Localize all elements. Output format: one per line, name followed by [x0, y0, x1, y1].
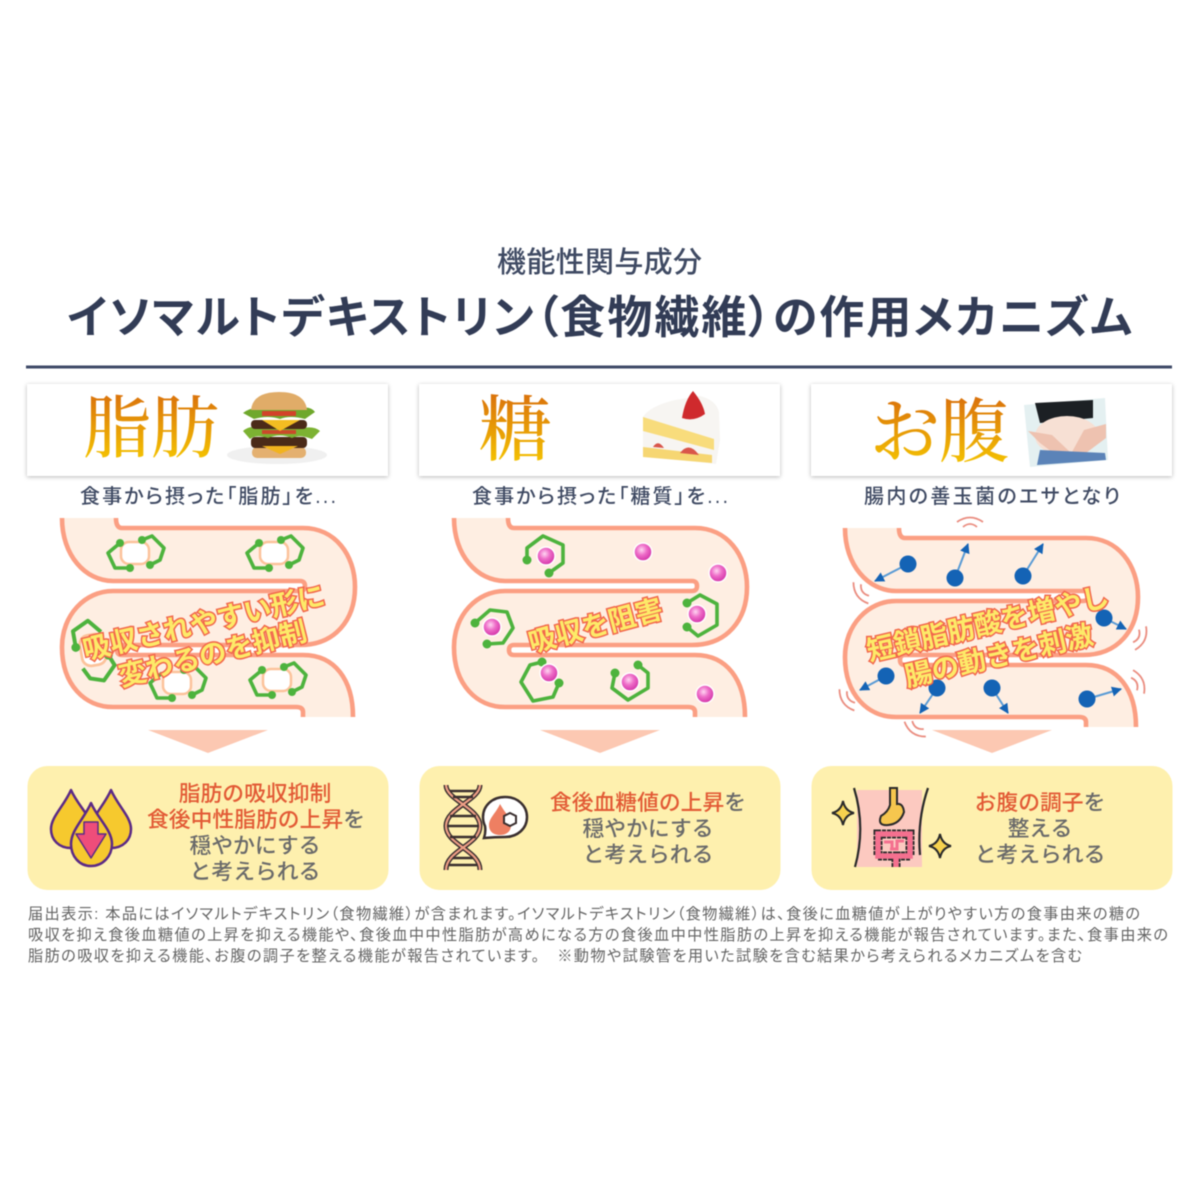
- intestine: belly: [845, 528, 1138, 727]
- icon: burger: [227, 392, 327, 464]
- arrow: fat: [148, 730, 268, 753]
- intestine: fat: [62, 518, 355, 717]
- icon: belly photo: [1024, 398, 1108, 467]
- heading: fat: 脂肪: [83, 391, 219, 467]
- result box: sugar: [420, 766, 780, 890]
- footnote: 脂肪の吸収を抑える機能、お腹の調子を整える機能が報告されています。 ※動物や試験管を用いた試験を含む結果から考えられるメカニズムを含む: [28, 947, 1082, 965]
- short-chain fatty acid arrows: [860, 544, 1126, 713]
- heading: sugar: 糖: [479, 391, 551, 471]
- lead text: sugar: 食事から摂った「糖質」を...: [472, 485, 728, 508]
- subtitle: 機能性関与成分: [497, 246, 702, 279]
- result text: fat: と考えられる: [190, 859, 320, 884]
- result box: belly: [812, 766, 1172, 890]
- footnote: 吸収を抑え食後血糖値の上昇を抑える機能や、食後血中中性脂肪が高めになる方の食後血中中性脂肪の上昇を抑える機能が報告されています。また、食事由来の: [28, 927, 1168, 944]
- molecule 4: [150, 666, 206, 702]
- panel: fat: [27, 384, 388, 890]
- molecule 1: [108, 536, 164, 572]
- header card: belly: [811, 384, 1172, 476]
- result text: sugar: 食後血糖値の上昇を: [550, 790, 746, 815]
- header card: fat: [27, 384, 388, 476]
- result text: fat: 穏やかにする: [190, 833, 320, 858]
- callout: fat: 変わるのを抑制: [116, 615, 310, 692]
- result text: belly: と考えられる: [975, 842, 1105, 867]
- footnote: [28, 905, 1168, 965]
- header card: sugar: [419, 384, 780, 476]
- motion marks: [836, 518, 1150, 740]
- result text: belly: 整える: [1008, 816, 1072, 841]
- result text: fat: 脂肪の吸収抑制: [179, 781, 331, 806]
- result text: fat: 食後中性脂肪の上昇を: [147, 807, 365, 832]
- result text: sugar: と考えられる: [583, 842, 713, 867]
- result text: belly: お腹の調子を: [975, 790, 1105, 815]
- footnote: 届出表示: 本品にはイソマルトデキストリン（食物繊維）が含まれます。イソマルトデキストリン（食物繊維）は、食後に血糖値が上がりやすい方の食事由来の糖の: [28, 905, 1140, 923]
- arrow: sugar: [540, 730, 660, 753]
- molecule 2: [247, 536, 303, 572]
- main title: イソマルトデキストリン（食物繊維）の作用メカニズム: [67, 292, 1132, 343]
- callout: belly: 腸の動きを刺激: [902, 619, 1097, 692]
- icon: oil drops: [51, 790, 131, 866]
- result text: fat: [147, 781, 365, 884]
- heading: belly: お腹: [870, 395, 1009, 472]
- lead text: fat: 食事から摂った「脂肪」を...: [80, 485, 336, 508]
- green molecules: [470, 536, 717, 701]
- molecule 3: [67, 618, 117, 685]
- icon: DNA and drop: [446, 785, 527, 870]
- molecule 5: [250, 663, 306, 699]
- result text: sugar: 穏やかにする: [582, 816, 714, 841]
- sugar spheres: [483, 543, 727, 703]
- panel: sugar: [419, 384, 780, 890]
- result text: sugar: [550, 790, 746, 867]
- callout: sugar: 吸収を阻害: [525, 593, 666, 659]
- panel: belly: [811, 384, 1172, 890]
- result box: fat: [28, 766, 388, 890]
- lead text: belly: 腸内の善玉菌のエサとなり: [864, 485, 1120, 508]
- callout: fat: 吸収されやすい形に: [80, 580, 328, 666]
- callout: belly: 短鎖脂肪酸を増やし: [864, 581, 1112, 667]
- icon: digestive system: [832, 788, 951, 867]
- result text: belly: [975, 790, 1105, 867]
- arrow: belly: [932, 730, 1052, 753]
- intestine: sugar: [454, 518, 747, 717]
- icon: cake: [643, 391, 720, 464]
